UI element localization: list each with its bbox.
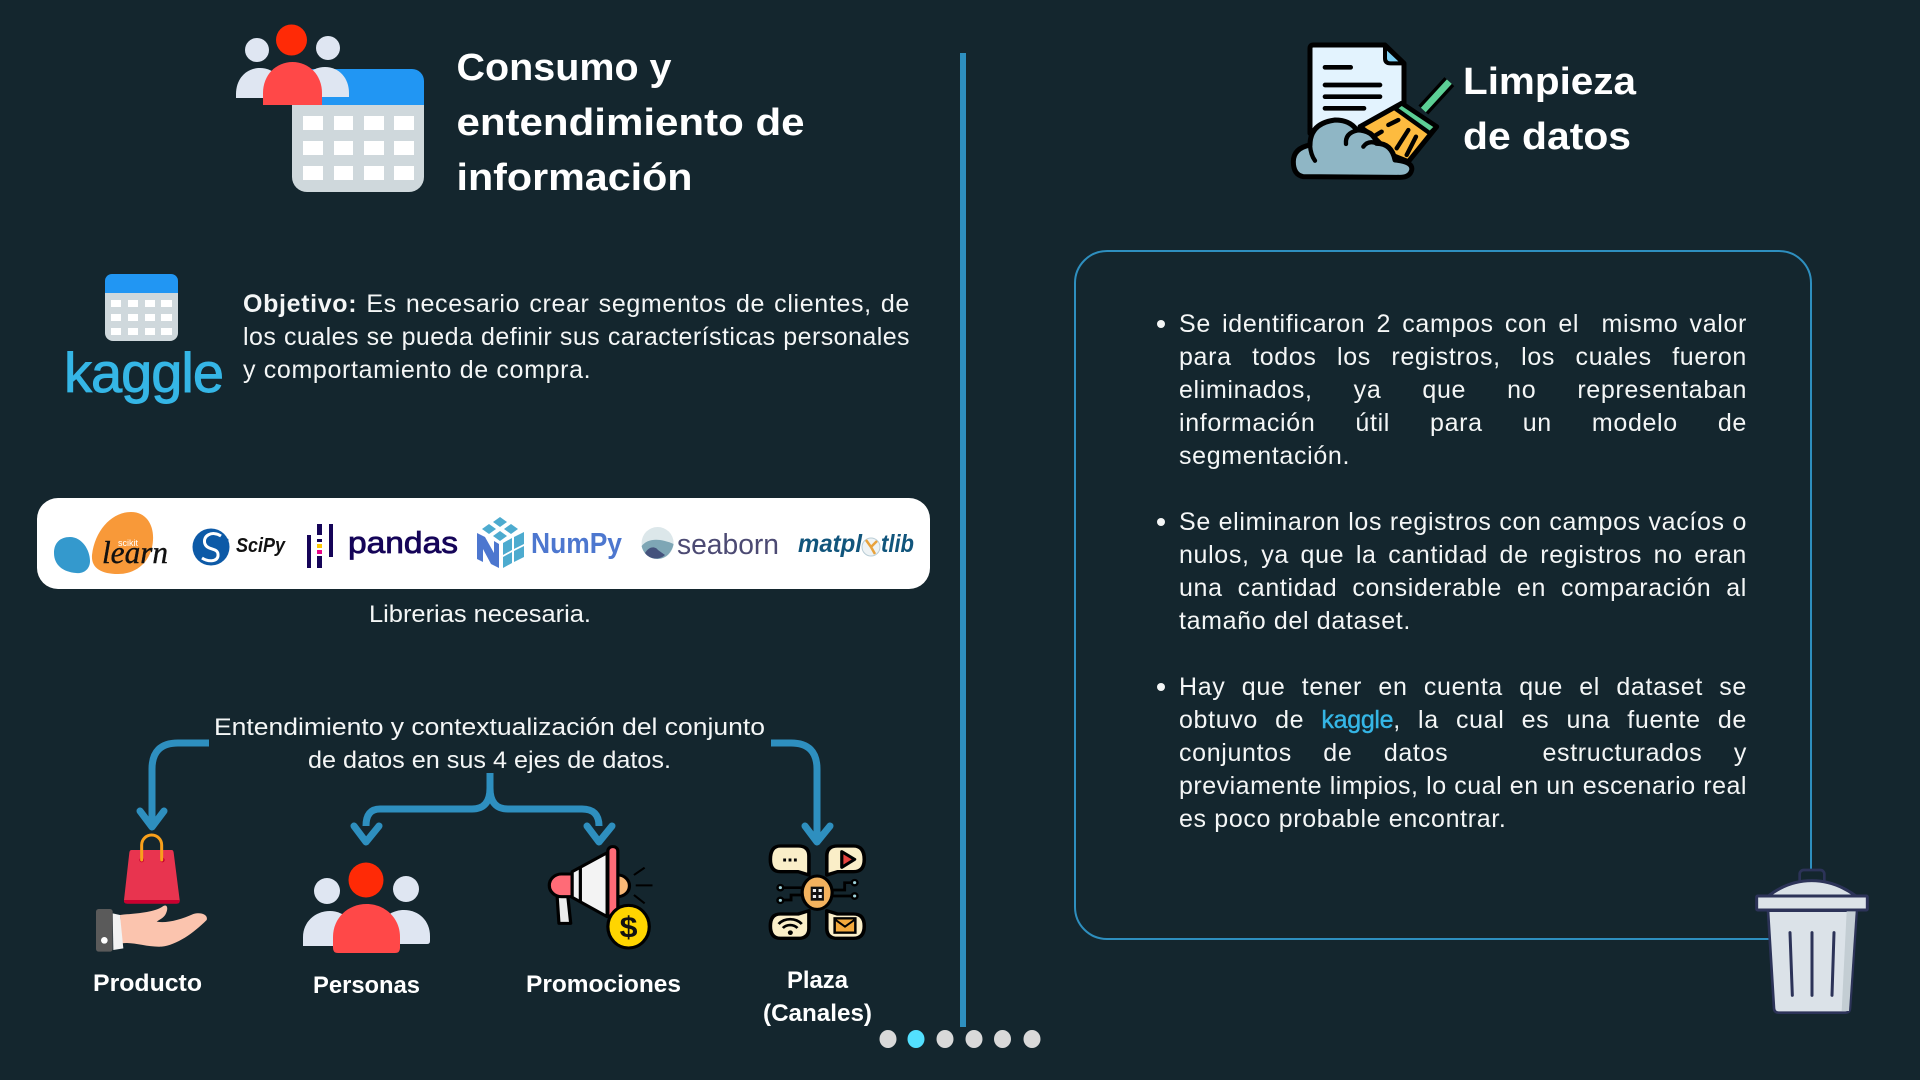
heading: consumo y entendimiento de información: Consumo y [456, 47, 672, 89]
bullet: dataset de kaggle: Hay que tener en cuenta que el dataset se [1179, 673, 1747, 701]
icon: document broom and cloud [1293, 45, 1449, 177]
bullet: registros con campos vacíos: una cantidad considerable en comparación al [1179, 574, 1747, 602]
arrow: to plaza [771, 743, 830, 842]
text: entendimiento y contextualización: Entendimiento y contextualización del conjunto [214, 714, 765, 741]
text: objetivo: los cuales se pueda definir sus características personales [243, 323, 910, 351]
logo: seaborn [642, 527, 779, 561]
bullet: dataset de kaggle: conjuntos de datos estructurados y [1179, 739, 1747, 767]
bullet: campos con mismo valor [1157, 310, 1747, 470]
panel: limpieza text box [1075, 251, 1811, 939]
label: producto: Producto [93, 970, 202, 997]
bullet: campos con mismo valor: segmentación. [1179, 442, 1350, 470]
label: plaza canales: (Canales) [763, 1000, 872, 1027]
logo: pandas [307, 524, 458, 568]
heading: limpieza de datos [1463, 61, 1637, 158]
bullet: registros con campos vacíos: Se eliminaron los registros con campos vacíos o [1179, 508, 1747, 536]
pagination dots [880, 1030, 1040, 1048]
bullet: dataset de kaggle: obtuvo de kaggle, la cual es una fuente de [1179, 706, 1747, 734]
icon: trash can [1757, 870, 1867, 1013]
text: objetivo: y comportamiento de compra. [243, 356, 591, 384]
bullet: dataset de kaggle: previamente limpios, lo cual en un escenario real [1179, 772, 1747, 800]
bullet: dataset de kaggle: es poco probable encontrar. [1179, 805, 1506, 833]
logo: scipy: SciPy [236, 535, 286, 557]
text: objetivo [243, 290, 910, 384]
logo: numpy [477, 517, 622, 568]
bullet: registros con campos vacíos: nulos, ya que la cantidad de registros no eran [1179, 541, 1747, 569]
divider line [960, 53, 966, 1027]
caption: librerias: Librerias necesaria. [369, 601, 591, 628]
bullet: campos con mismo valor: para todos los registros, los cuales fueron [1179, 343, 1747, 371]
bullet: campos con mismo valor: Se identificaron 2 campos con el mismo valor [1179, 310, 1747, 338]
logo: numpy: NumPy [531, 528, 622, 560]
icon: people and calendar [236, 24, 424, 192]
logo: kaggle with calendar: kaggle [64, 341, 224, 404]
heading: limpieza de datos: de datos [1463, 116, 1631, 158]
label: promociones: Promociones [526, 971, 681, 998]
icon: plaza channels [770, 846, 864, 938]
arrow: brace to personas and promociones [354, 773, 612, 842]
text: entendimiento y contextualización: de datos en sus 4 ejes de datos. [308, 747, 671, 774]
bullet: dataset de kaggle [1157, 673, 1747, 833]
logo: scikit-learn: learn [102, 534, 168, 570]
text: entendimiento y contextualización [214, 714, 765, 774]
arrow: to producto [140, 743, 209, 827]
bullet: campos con mismo valor: información útil para un modelo de [1179, 409, 1747, 437]
logo: scikit-learn: scikit [118, 538, 138, 548]
logo: kaggle with calendar [64, 274, 224, 404]
panel: libraries bar [37, 498, 930, 589]
bullet: registros con campos vacíos [1157, 508, 1747, 635]
logo: seaborn: seaborn [677, 529, 779, 561]
icon: promociones megaphone and coin: $ [620, 910, 638, 944]
heading: consumo y entendimiento de información [456, 47, 804, 199]
bullet: registros con campos vacíos: tamaño del dataset. [1179, 607, 1411, 635]
logo: matplotlib: matpl [798, 530, 863, 558]
icon: personas [303, 862, 430, 953]
icon: producto bag on hand [96, 835, 207, 952]
label: personas: Personas [313, 972, 420, 999]
logo: pandas: pandas [348, 525, 458, 560]
heading: consumo y entendimiento de información: entendimiento de [456, 102, 804, 144]
logo: matplotlib [798, 530, 914, 558]
logo: matplotlib: tlib [881, 530, 914, 558]
label: plaza canales [763, 967, 872, 1027]
heading: consumo y entendimiento de información: información [456, 157, 692, 199]
heading: limpieza de datos: Limpieza [1463, 61, 1637, 103]
label: plaza canales: Plaza [787, 967, 849, 994]
logo: scipy [192, 528, 286, 566]
logo: scikit-learn [54, 512, 168, 574]
text: objetivo: Objetivo: Es necesario crear segmentos de clientes, de [243, 290, 910, 318]
icon: promociones megaphone and coin [549, 847, 652, 948]
bullet: campos con mismo valor: eliminados, ya que no representaban [1179, 376, 1747, 404]
